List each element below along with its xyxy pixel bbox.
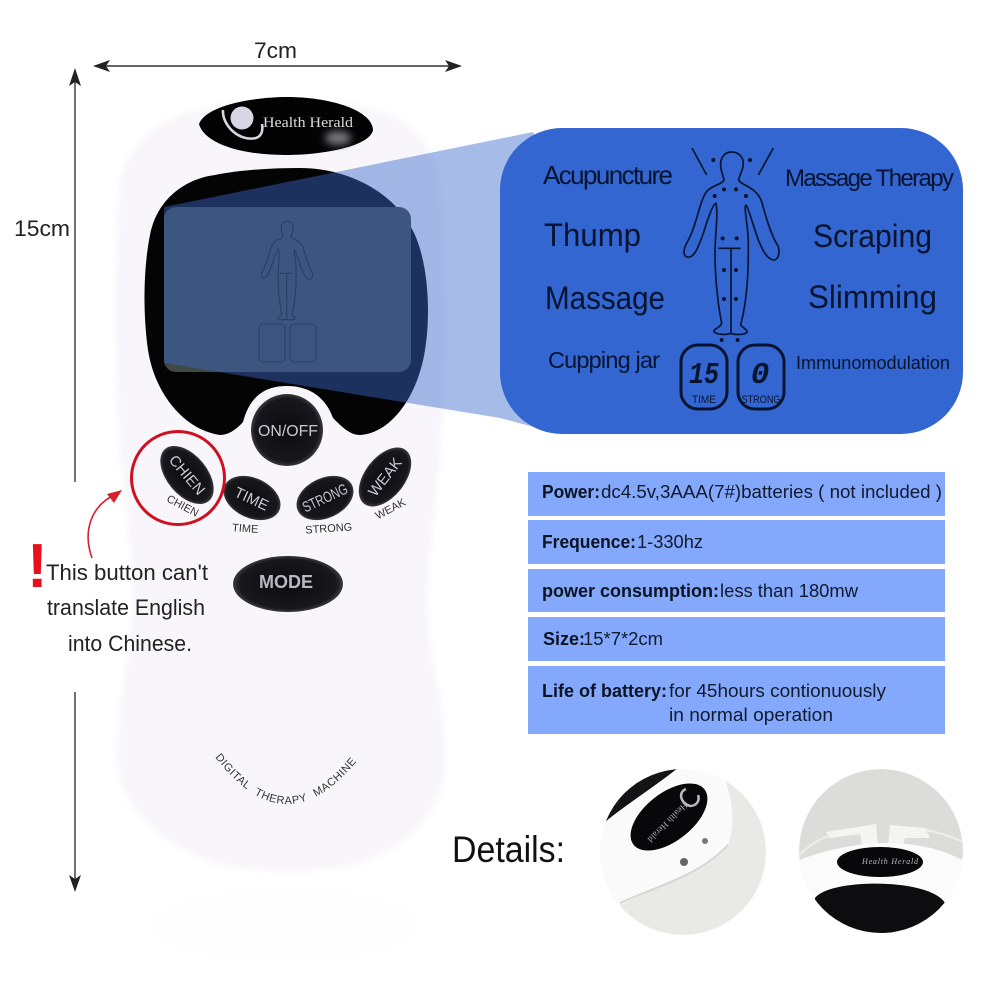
mode labels: Thump [544,217,641,253]
device printed name: DIGITAL THERAPY MACHINE [216,753,356,804]
spec row: battery life: Life of battery: [542,681,667,701]
button printed labels: WEAK [373,496,408,522]
spec row: frequency [528,520,945,564]
device logo plate [199,97,373,155]
detail photo: side of device: Health Herald [645,801,690,845]
on/off button [251,394,323,466]
strength readout [738,345,784,409]
details heading: Details: [452,829,565,870]
chien button: CHIEN [165,452,208,499]
button printed labels: CHIEN [164,493,200,520]
weak button [348,438,422,516]
mode button: MODE [259,572,313,592]
time readout [681,345,727,409]
spec row: size: Size: [543,629,585,649]
detail photo: top of device: Health Herald [861,857,919,866]
mode labels: Cupping jar [548,347,660,373]
red curved arrow [88,490,122,558]
button printed labels: TIME [232,522,259,536]
warning note [46,560,208,656]
button printed labels [164,493,408,537]
mode labels: Scraping [813,218,932,254]
chien button [150,436,224,514]
warning note: into Chinese. [68,631,192,656]
on/off button: ON/OFF [258,423,318,440]
exclamation mark: ! [27,532,48,601]
weak button: WEAK [365,455,406,500]
mode labels [543,160,954,373]
strong button [289,467,361,529]
warning note: translate English [47,595,205,620]
spec row: power: dc4.5v,3AAA(7#)batteries ( not included ) [601,481,942,502]
LCD body figure [259,221,316,362]
device logo plate: Health Herald [263,115,354,131]
width dimension: 7cm [254,38,297,63]
mode button [233,556,343,612]
spec row: frequency: Frequence: [542,532,636,552]
mode labels: Massage [545,280,665,316]
height dimension: 15cm [14,216,70,241]
mode labels: Acupuncture [543,160,673,190]
strong button: STRONG [300,481,351,516]
width dimension [93,38,462,72]
strength readout: 0 [751,358,769,393]
height dimension [14,68,81,892]
mode labels: Massage Therapy [785,165,954,192]
spec row: size: 15*7*2cm [583,628,663,649]
time button: TIME [232,484,271,515]
mode labels: Slimming [808,279,937,315]
blue zoom projection overlay [164,132,600,433]
panel: blue LCD enlargement [500,128,963,434]
strength readout: STRONG [742,394,780,406]
device body [115,100,445,963]
device screen [144,168,428,435]
detail photo: top of device [799,769,963,933]
spec row: size [528,617,945,661]
red highlight circle [132,432,224,524]
time button [216,467,288,529]
spec row: power [528,472,945,516]
spec row: battery life: for 45hours contionuously [669,680,887,701]
body figure with acupoints [684,148,779,342]
spec row: battery life [528,666,945,734]
spec row: consumption: power consumption: [542,581,719,601]
mode labels: Immunomodulation [796,353,950,373]
spec row: frequency: 1-330hz [637,531,703,552]
time readout: TIME [692,394,716,406]
warning note: This button can't [46,560,208,585]
spec row: consumption [528,569,945,612]
spec row: battery life: in normal operation [669,704,833,725]
button printed labels: STRONG [305,521,353,537]
time readout: 15 [689,358,719,393]
spec row: consumption: less than 180mw [720,580,859,601]
spec row: power: Power: [542,482,600,502]
detail photo: side of device [606,769,766,935]
